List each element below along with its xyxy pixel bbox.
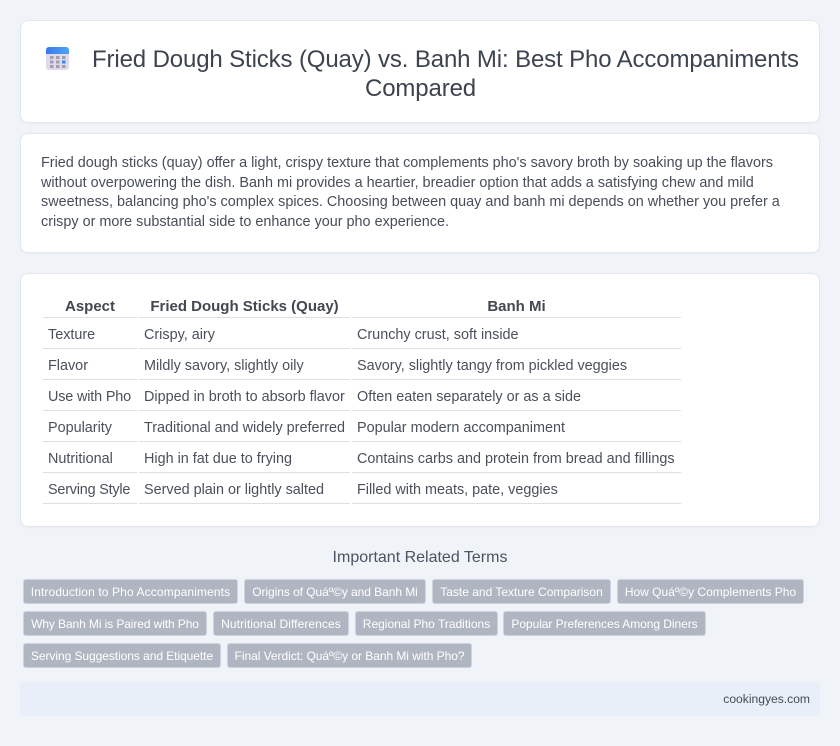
related terms tags: How Quáº©y Complements Pho bbox=[625, 585, 796, 599]
row: use with pho: Often eaten separately or as a side bbox=[357, 389, 581, 405]
row: flavor: Savory, slightly tangy from pickled veggies bbox=[357, 358, 627, 374]
row: use with pho: Use with Pho bbox=[48, 389, 131, 405]
title bbox=[92, 46, 799, 102]
footer credit: cookingyes.com bbox=[723, 692, 810, 706]
table header: Banh Mi bbox=[487, 298, 546, 315]
row: popularity: Popularity bbox=[48, 420, 112, 436]
panel: summary card bbox=[20, 133, 820, 253]
row: flavor: Mildly savory, slightly oily bbox=[144, 358, 304, 374]
related terms tags: Nutritional Differences bbox=[221, 617, 341, 631]
row: nutritional: Nutritional bbox=[48, 451, 113, 467]
related terms tags: Origins of Quáº©y and Banh Mi bbox=[252, 585, 418, 599]
title: Fried Dough Sticks (Quay) vs. Banh Mi: Best Pho Accompaniments bbox=[92, 46, 799, 73]
row: serving style bbox=[48, 482, 558, 498]
row: use with pho: Dipped in broth to absorb flavor bbox=[144, 389, 345, 405]
row: popularity: Traditional and widely preferred bbox=[144, 420, 345, 436]
row: nutritional: High in fat due to frying bbox=[144, 451, 292, 467]
related terms tags: Regional Pho Traditions bbox=[363, 617, 490, 631]
row: texture: Crunchy crust, soft inside bbox=[357, 327, 519, 343]
panel: title card bbox=[20, 20, 820, 123]
summary text: sweetness, balancing pho's complex spices. Choosing between quay and banh mi depends on whether you prefer a bbox=[41, 194, 780, 210]
row: flavor bbox=[48, 358, 627, 374]
row: flavor: Flavor bbox=[48, 358, 88, 374]
related terms tags bbox=[23, 579, 804, 668]
related terms tags: Taste and Texture Comparison bbox=[440, 585, 603, 599]
row: serving style: Serving Style bbox=[48, 482, 130, 498]
summary text: Fried dough sticks (quay) offer a light, crispy texture that complements pho's savory broth by soaking up the flavors bbox=[41, 155, 773, 171]
table header bbox=[65, 298, 546, 315]
row: popularity: Popular modern accompaniment bbox=[357, 420, 565, 436]
row: serving style: Filled with meats, pate, veggies bbox=[357, 482, 558, 498]
row: texture: Texture bbox=[48, 327, 95, 343]
related terms tags: Final Verdict: Quáº©y or Banh Mi with Pho? bbox=[235, 649, 464, 663]
row: nutritional bbox=[48, 451, 675, 467]
row: use with pho bbox=[48, 389, 581, 405]
comparison table bbox=[43, 298, 681, 504]
related terms tags: Why Banh Mi is Paired with Pho bbox=[31, 617, 199, 631]
heading: important related terms: Important Related Terms bbox=[333, 549, 507, 566]
row: texture: Crispy, airy bbox=[144, 327, 215, 343]
row: popularity bbox=[48, 420, 565, 436]
summary text: crispy or more substantial side to enhance your pho experience. bbox=[41, 214, 449, 230]
panel: comparison table card bbox=[20, 273, 820, 527]
row: texture bbox=[48, 327, 519, 343]
row: nutritional: Contains carbs and protein from bread and fillings bbox=[357, 451, 675, 467]
footer bar bbox=[20, 682, 820, 716]
row: serving style: Served plain or lightly salted bbox=[144, 482, 324, 498]
related terms tags: Popular Preferences Among Diners bbox=[511, 617, 698, 631]
related terms tags: Introduction to Pho Accompaniments bbox=[31, 585, 230, 599]
table header: Aspect bbox=[65, 298, 115, 315]
related terms tags: Serving Suggestions and Etiquette bbox=[31, 649, 213, 663]
table header: Fried Dough Sticks (Quay) bbox=[150, 298, 339, 315]
title: Compared bbox=[365, 75, 476, 102]
summary text: without overpowering the dish. Banh mi provides a heartier, breadier option that adds a satisfying chew and mild bbox=[41, 175, 754, 191]
summary text bbox=[41, 155, 780, 230]
icon: calendar bbox=[46, 47, 69, 70]
